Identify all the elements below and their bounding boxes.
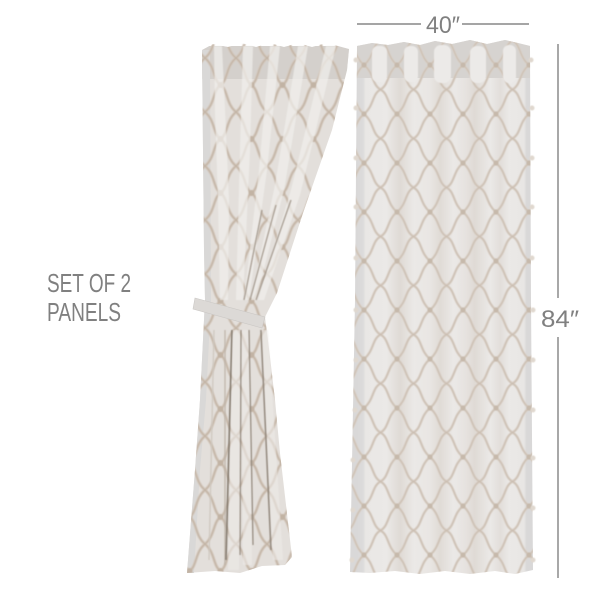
height value: 84″ [541, 306, 580, 333]
left curtain outer hem [187, 50, 211, 573]
label line one: SET OF 2 [47, 268, 131, 298]
left curtain base fabric [187, 49, 349, 573]
right curtain edge knots [350, 58, 536, 562]
tieback strap [193, 298, 265, 328]
label line two: PANELS [47, 297, 121, 327]
label: set of 2 panels [47, 268, 131, 327]
left curtain upper folds [214, 46, 336, 300]
right curtain fabric [348, 38, 536, 578]
panel: right curtain flat [348, 38, 536, 578]
width value: 40″ [426, 12, 460, 39]
panel: left curtain tied back [185, 44, 355, 576]
right curtain lattice [348, 38, 536, 578]
right curtain header tabs [372, 45, 516, 83]
left curtain header band [200, 46, 350, 79]
left curtain lower folds [228, 330, 283, 570]
left curtain lattice [185, 44, 355, 576]
right curtain header band [357, 38, 530, 78]
left curtain fold shadows [209, 200, 291, 565]
